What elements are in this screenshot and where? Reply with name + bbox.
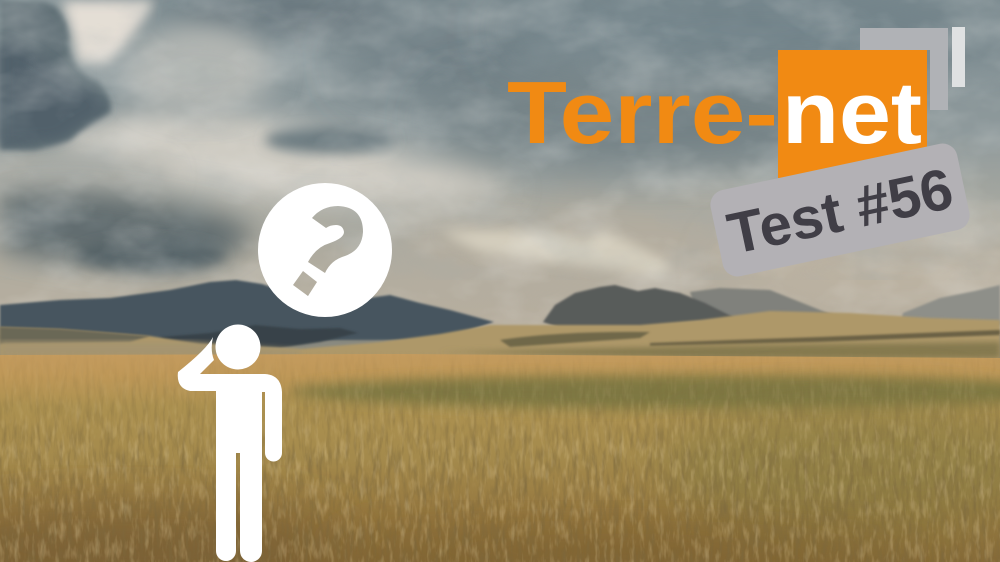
dark left cloud: [0, 0, 110, 150]
person body: [178, 337, 282, 562]
background: foothills: [0, 311, 1000, 375]
logo light bar: [952, 27, 965, 87]
icon: thinking person: [178, 324, 282, 562]
logo text white: net: [782, 63, 922, 162]
person head: [216, 324, 260, 370]
logo grey square: [860, 28, 948, 110]
light band: [60, 111, 520, 206]
icon: question mark bubble: [258, 183, 392, 317]
background: olive band right: [440, 342, 1000, 358]
olive band: [290, 375, 1000, 409]
background: sky: [0, 0, 1000, 335]
background: shaded terrace: [500, 332, 650, 347]
background: left tan ground: [0, 342, 300, 358]
background: mountains right: [543, 285, 735, 328]
logo text orange: Terre-: [507, 63, 778, 162]
lower sky: [390, 217, 910, 293]
badge text: Test #56: [722, 156, 959, 267]
badge: Test #56: [708, 141, 972, 279]
background: wheat field: [0, 350, 1000, 562]
background: left dark ground: [0, 327, 150, 344]
background: distant hill right: [900, 285, 1000, 325]
bright low clouds: [440, 230, 672, 276]
lower-left dark cloud: [0, 192, 255, 273]
upper dark cloud: [180, 0, 400, 37]
logo: Terre-net: [507, 27, 965, 178]
logo orange square: [778, 50, 927, 178]
background: far ridge right: [690, 288, 835, 322]
background: dark stripe right: [650, 330, 1000, 346]
bright patch: [60, 0, 155, 65]
badge background: [708, 141, 972, 279]
background: mountains left: [0, 280, 494, 340]
background: dark treeline: [160, 325, 358, 348]
